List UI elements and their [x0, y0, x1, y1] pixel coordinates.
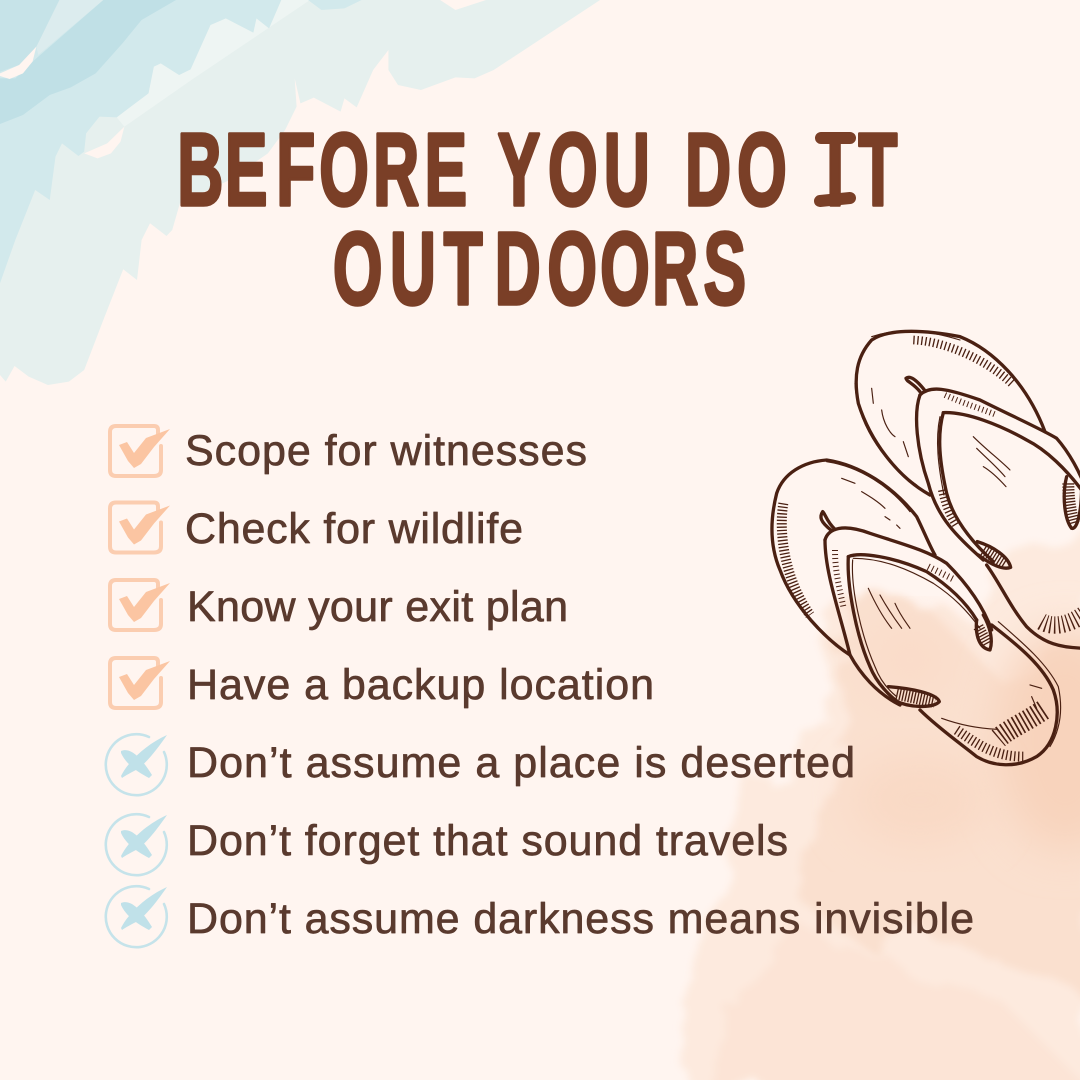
- title line 2: O: [600, 211, 650, 327]
- text: Check for wildlife: [185, 505, 523, 553]
- title line 2: O: [547, 211, 597, 327]
- title: [177, 112, 897, 327]
- title line 2: [333, 211, 746, 327]
- icon: check box: [110, 580, 170, 630]
- title line 1: T: [858, 112, 897, 228]
- title line 2: D: [495, 211, 541, 327]
- title line 2: R: [652, 211, 698, 327]
- icon: cross circle: [106, 814, 167, 875]
- title line 1: O: [737, 112, 787, 228]
- title line 1: U: [604, 112, 650, 228]
- title line 1: R: [373, 112, 419, 228]
- item: scope for witnesses: [110, 426, 587, 476]
- text: Don’t assume a place is deserted: [187, 739, 855, 787]
- front flip-flop: [772, 460, 1061, 765]
- back flip-flop: [855, 331, 1080, 648]
- title line 2: T: [444, 211, 483, 327]
- peach watercolor wash: [680, 530, 1080, 1080]
- text: Don’t forget that sound travels: [187, 817, 788, 865]
- item: have a backup location: [110, 658, 654, 709]
- item: don't assume darkness invisible: [106, 886, 974, 947]
- title line 1: O: [548, 112, 598, 228]
- title line 1: O: [319, 112, 369, 228]
- title line 1: E: [424, 112, 467, 228]
- illustration: flip-flops: [772, 331, 1080, 765]
- title line 1: [177, 112, 897, 228]
- item: check for wildlife: [110, 502, 523, 553]
- icon: check box: [110, 426, 170, 476]
- item: don't forget sound travels: [106, 814, 788, 875]
- text: Know your exit plan: [187, 583, 568, 631]
- title line 1: E: [225, 112, 267, 228]
- icon: check box: [110, 502, 170, 552]
- item: know your exit plan: [110, 580, 568, 631]
- icon: cross circle: [106, 734, 167, 795]
- icon: check box: [110, 658, 170, 708]
- title line 2: S: [703, 211, 746, 327]
- item: don't assume deserted: [106, 734, 855, 795]
- title line 1: F: [276, 112, 315, 228]
- checklist: [106, 426, 974, 947]
- blue brush strokes: [0, 0, 600, 385]
- icon: cross circle: [106, 886, 167, 947]
- text: Scope for witnesses: [185, 427, 587, 475]
- text: Have a backup location: [187, 661, 654, 709]
- title line 1: Y: [498, 112, 540, 228]
- title line 1: D: [685, 112, 731, 228]
- title line 2: U: [390, 211, 436, 327]
- title line 2: O: [333, 211, 383, 327]
- text: Don’t assume darkness means invisible: [187, 895, 974, 943]
- title line 1: B: [177, 112, 223, 228]
- title line 1: I: [826, 112, 844, 228]
